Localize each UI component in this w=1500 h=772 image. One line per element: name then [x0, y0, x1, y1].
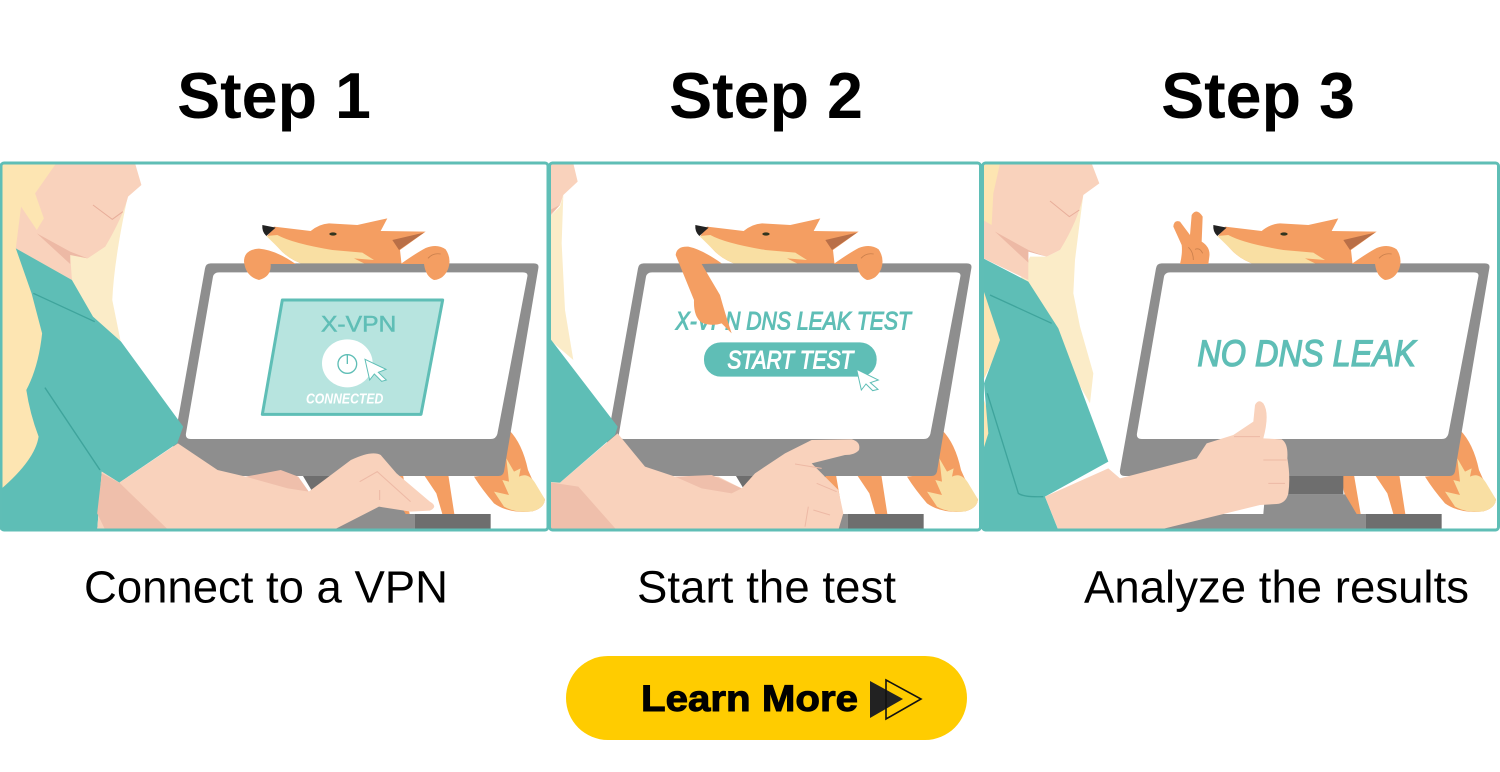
- panel: step 1 illustration: X-VPN: [321, 312, 396, 337]
- panel: step 3 illustration: [980, 163, 1498, 530]
- heading: Step 2: Step 2: [669, 60, 863, 132]
- frame: step 3: [982, 163, 1498, 530]
- caption: step 3: Analyze the results: [1084, 562, 1469, 612]
- frame: step 2: [550, 163, 980, 530]
- icon: double arrow: [870, 680, 921, 719]
- panel: step 1 illustration: CONNECTED: [306, 391, 384, 407]
- caption: step 2: Start the test: [637, 562, 896, 612]
- panel: step 2 illustration: [545, 163, 980, 530]
- panel: step 2 illustration: START TEST: [727, 347, 855, 374]
- frame: step 1: [1, 163, 548, 530]
- heading: Step 1: Step 1: [177, 60, 371, 132]
- panel: step 1 illustration: [0, 163, 548, 530]
- button: Learn More: Learn More: [641, 678, 858, 719]
- button: Learn More: [566, 656, 967, 740]
- panel: step 3 illustration: NO DNS LEAK: [1197, 332, 1417, 374]
- heading: Step 3: Step 3: [1161, 60, 1355, 132]
- caption: step 1: Connect to a VPN: [84, 562, 448, 612]
- panel: step 2 illustration: X-VPN DNS LEAK TEST: [675, 308, 913, 335]
